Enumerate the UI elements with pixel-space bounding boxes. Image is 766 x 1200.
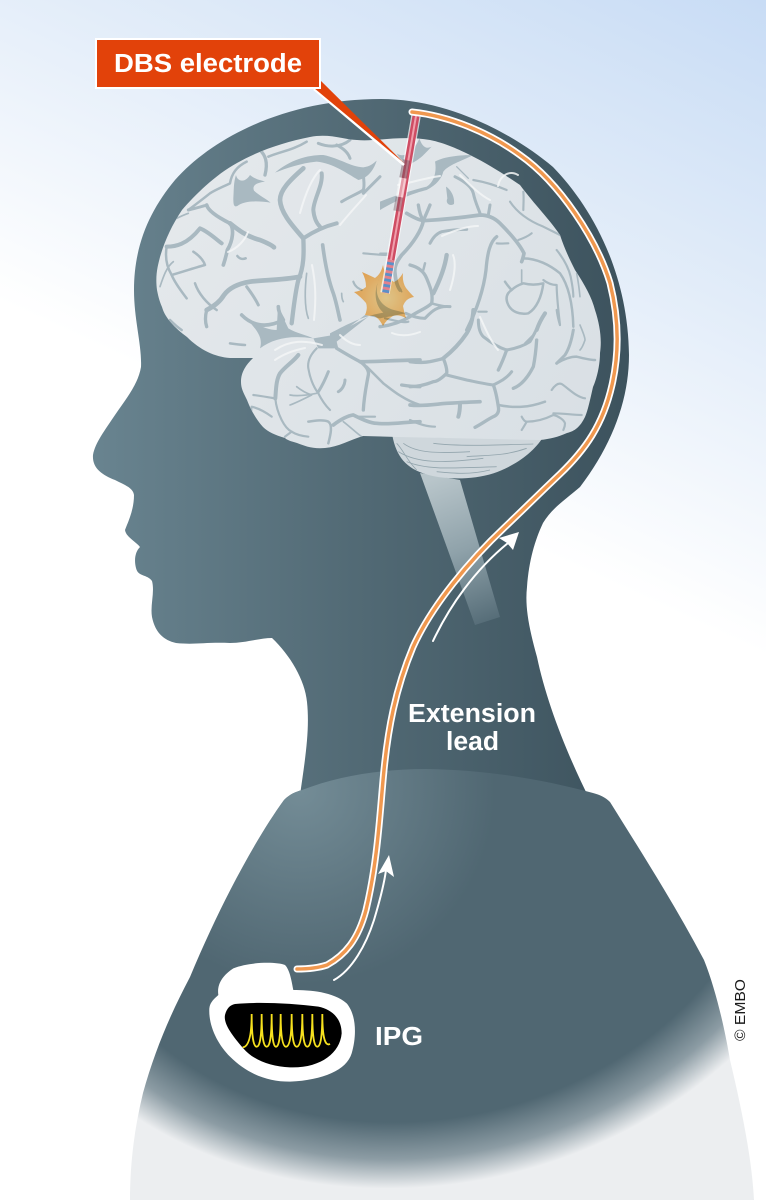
- sulci: temporal lobe: [230, 307, 420, 443]
- pulse trace: [243, 1014, 330, 1047]
- direction arrow: lower: [334, 855, 394, 980]
- sulci: [160, 138, 595, 443]
- sulci: occipital lobe: [410, 310, 595, 430]
- label: extension lead: [408, 700, 536, 756]
- body / shoulders: [130, 769, 754, 1200]
- screen: [225, 1003, 342, 1067]
- direction arrow: upper: [433, 532, 519, 641]
- cerebrum: [156, 136, 601, 448]
- cerebellum: [392, 432, 543, 478]
- brain: [156, 136, 601, 478]
- extension lead: [297, 112, 617, 969]
- label: extension lead: lead: [446, 728, 499, 756]
- DBS electrode: [385, 116, 416, 293]
- label: extension lead: Extension: [408, 700, 536, 728]
- head silhouette: [93, 99, 629, 800]
- sulci: parietal lobe: [380, 138, 580, 330]
- spinal cord: [420, 473, 500, 625]
- gyrus highlights: [228, 170, 518, 360]
- sulci: frontal lobe: [160, 140, 380, 330]
- stimulation target star: [354, 265, 414, 326]
- label: IPG: IPG: [375, 1021, 423, 1051]
- implanted pulse generator: [209, 963, 355, 1082]
- copyright: © EMBO: [733, 979, 749, 1041]
- sulci: around target: [330, 253, 450, 342]
- callout: DBS electrode: [96, 39, 404, 165]
- callout: DBS electrode: DBS electrode: [114, 50, 302, 78]
